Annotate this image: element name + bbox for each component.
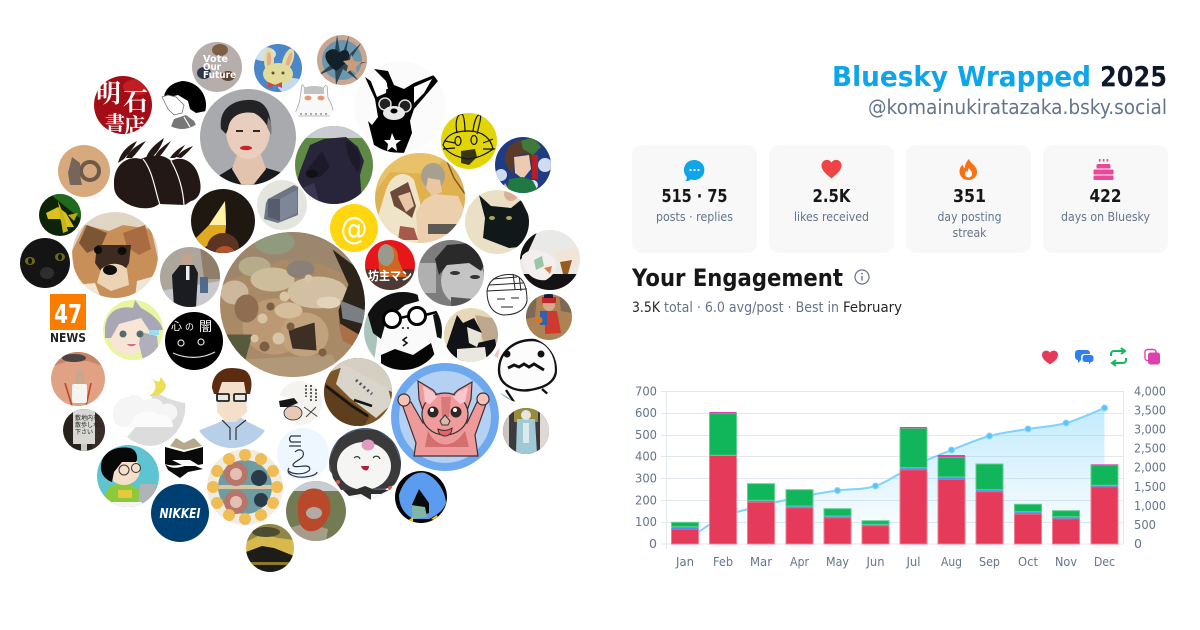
cumulative line [685,408,1104,541]
avatar: grey bag [257,180,307,230]
y axis labels: right [1134,384,1166,551]
avatar: yellow at sign [330,204,378,252]
avatar: tarot card [503,408,549,454]
avatar: bald man poster: 坊主マン [368,267,412,284]
avatar: sketch character [486,274,528,316]
y axis labels: right: 3,000 [1134,422,1166,436]
avatar: Akashi Shoten: 書 [105,107,125,136]
engagement summary: 3.5K [632,300,661,316]
engagement summary: February [843,300,902,316]
y axis labels: left: 500 [635,428,657,442]
avatar: black peach feathers [114,138,201,208]
avatar: snake drawing [277,428,329,480]
y axis labels: right: 2,000 [1134,460,1166,474]
x axis labels: Dec [1094,555,1115,569]
avatar: fluffy puppy [72,212,158,298]
avatar: glasses drawing [364,292,442,370]
avatar: kokoro no yami: 闇 [199,316,212,335]
avatar: child in red cape [526,294,572,340]
avatar: black chihuahua [365,69,438,153]
bars: reposts [672,413,1118,527]
avatar: Vote Our Future: Our [203,62,221,73]
avatar: 47NEWS logo: NEWS [50,331,86,345]
stat card: likes [769,145,894,253]
x axis labels [675,555,1115,569]
avatar: tuxedo cat [444,308,498,362]
avatar: 47NEWS logo: 47 [54,300,82,330]
avatar: manga profile [158,81,206,129]
y axis labels: right: 3,500 [1134,404,1166,418]
y axis labels: right: 1,000 [1134,499,1166,513]
x axis labels: Jul [906,555,920,569]
avatar: Vote Our Future: Future [203,70,236,81]
y axis labels: left: 100 [635,515,657,529]
icon: reposts [1111,348,1126,366]
avatar: kokoro no yami: の [185,320,194,333]
x axis labels: Aug [941,555,962,569]
title year: 2025 [1100,60,1167,93]
y axis labels: right: 2,500 [1134,442,1166,456]
avatar: red lion statue [286,481,346,541]
avatar: black and white man [418,240,487,307]
avatar: Kuromi [329,428,401,500]
avatar: bald man poster [365,240,415,291]
avatar: tan stamp [58,145,110,197]
icon: speech bubble [684,160,704,181]
y axis labels: right: 1,500 [1134,480,1166,494]
stat card: streak: 351 [953,186,986,207]
icon: quotes [1145,350,1160,364]
avatar: grey-haired anime girl [103,300,163,360]
avatar: warning sign [63,409,105,452]
stat card: likes: 2.5K [812,186,851,207]
stat card: streak [906,145,1031,253]
avatar: illustrated couple [375,153,465,243]
avatar: eye and bottle [51,352,105,406]
avatar: kokoro no yami: 心 [171,318,182,334]
avatar: manga panel [278,381,322,425]
avatar: yellow rabbit doodle [441,113,497,169]
y axis labels: left: 300 [635,472,657,486]
x axis labels: Apr [790,555,809,569]
handle: @komainukiratazaka.bsky.social [868,95,1167,119]
y axis labels: right: 500 [1134,518,1156,532]
x axis labels: Jun [866,555,884,569]
stat card: days on Bluesky [1043,145,1168,253]
avatar: sunlight through dark [191,189,255,253]
avatar: heart and star [317,35,367,85]
avatar: warning sign: 敷地内を [75,413,99,422]
avatar: sneakers [324,358,392,426]
bars: quotes [710,412,1118,465]
x axis labels: Oct [1018,555,1038,569]
heading: Your Engagement: Your Engagement [631,264,843,292]
grid lines [661,391,1124,549]
avatar: Nikkei: NIKKEI [160,507,201,522]
x axis labels: Mar [750,555,772,569]
stat card: likes: likes received [794,210,869,224]
avatar: kokoro no yami [165,312,223,370]
engagement chart [635,384,1166,569]
title: Bluesky Wrapped [832,60,1091,93]
avatar: cream rabbit on sky [254,44,302,92]
y axis labels: left [635,384,657,551]
engagement summary: total · 6.0 avg/post · Best in [664,300,839,316]
stat card: days on Bluesky: 422 [1090,186,1122,207]
bars: likes [672,455,1118,544]
icon: flame [960,159,977,180]
stat card: streak: day posting [938,210,1002,224]
header [832,60,1167,119]
avatar: man in suit [160,247,220,307]
y axis labels: left: 700 [635,384,657,398]
avatar: blob face [491,337,557,403]
avatar cluster [20,35,580,572]
x axis labels: Jan [675,555,694,569]
avatar: open book hands [165,438,203,478]
icon: replies [1075,350,1094,364]
icon: likes [1042,351,1058,364]
avatar: penguin [395,471,447,523]
cumulative points [834,405,1108,494]
avatar: pink sugar glider [391,363,499,471]
cumulative area [685,408,1104,544]
y axis labels: left: 0 [649,537,657,551]
avatar: sunset [246,524,294,572]
avatar: illustrated man with glasses [192,368,272,448]
avatar: yellow flower ring [207,449,283,525]
x axis labels: May [826,555,849,569]
y axis labels: right: 4,000 [1134,384,1166,398]
avatar: Akashi Shoten: 明 [96,74,121,110]
avatar: yellow at sign: @ [340,211,368,247]
avatar: yellow flower on green [39,194,81,236]
avatar: Akashi Shoten: 石 [123,82,148,118]
y axis labels: left: 200 [635,494,657,508]
stat card: posts and replies: posts · replies [656,210,733,224]
y axis labels: left: 400 [635,450,657,464]
avatar: Akashi Shoten [94,76,152,134]
avatar: stone guardian statue [220,230,366,378]
avatar: Akashi Shoten: 店 [124,110,145,140]
avatar: painted cup [520,230,580,290]
x axis labels: Sep [979,555,1000,569]
avatar: black cat face [20,238,70,288]
stat card: streak: streak [952,226,987,240]
avatar: kimono woman [495,137,552,193]
stat card: days on Bluesky: days on Bluesky [1061,210,1150,224]
avatar: Vote Our Future: Vote [203,54,228,65]
icon: info [855,270,869,284]
x axis labels: Feb [713,555,733,569]
avatar: Nikkei [151,484,209,542]
stat card: posts and replies [632,145,757,253]
avatar: woman portrait [200,89,296,189]
avatar: black dog [295,126,373,204]
avatar: black cat on cream [465,187,529,254]
icon: heart [822,160,842,178]
x axis labels: Nov [1055,555,1077,569]
avatar: warning sign: 下さい [75,427,93,436]
avatar: Vote Our Future [192,42,242,92]
bars: replies [672,468,1118,529]
avatar: 47NEWS logo [50,294,86,345]
avatar: owl [296,84,334,116]
avatar: boy with glasses and laptop [97,445,159,508]
stat card: posts and replies: 515 · 75 [662,186,728,207]
icon: cake [1094,159,1114,180]
y axis labels: left: 600 [635,406,657,420]
y axis labels: right: 0 [1134,537,1142,551]
chart legend [1042,348,1160,366]
avatar: warning sign: 散歩しない [75,420,105,429]
avatar: moon and clouds [113,377,185,446]
